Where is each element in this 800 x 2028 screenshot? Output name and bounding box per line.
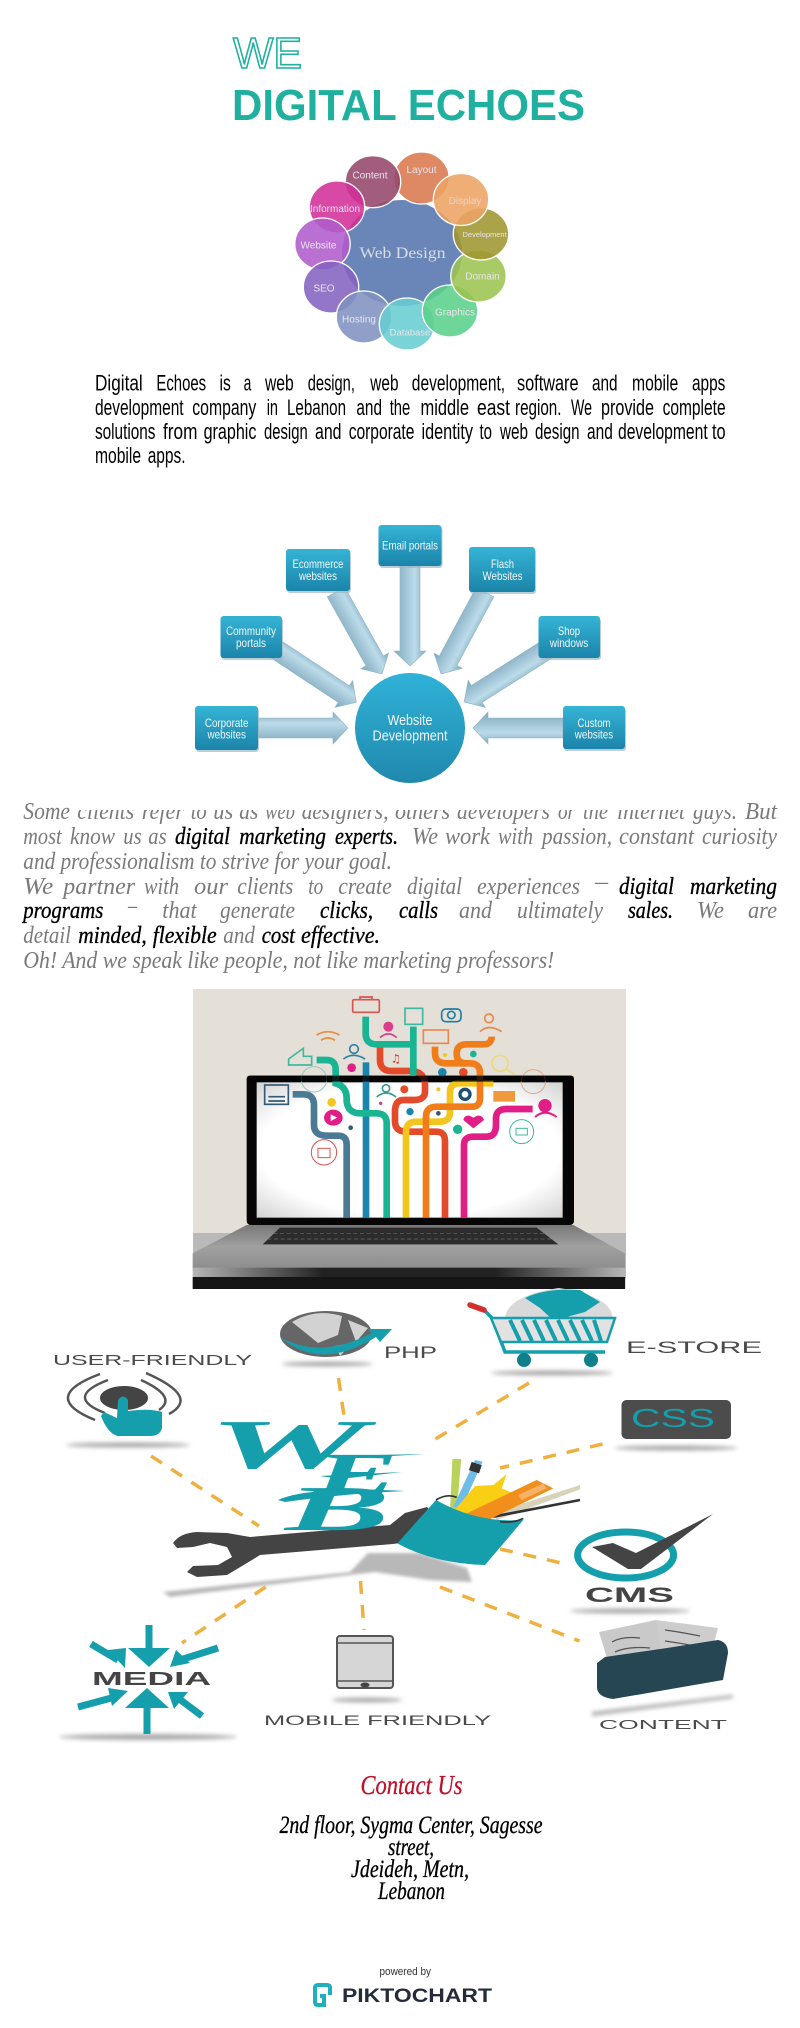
text block: about paragraph: as xyxy=(239,799,258,825)
icon: e-store shopping cart: E-STORE xyxy=(626,1338,762,1357)
text block: address: street, xyxy=(388,1834,434,1861)
text block: intro paragraph: corporate xyxy=(349,419,414,444)
text block: intro paragraph: Digital xyxy=(95,370,143,396)
text block: intro paragraph: a xyxy=(244,370,252,396)
text block: about paragraph: effective. xyxy=(301,923,380,949)
text block: about paragraph: are xyxy=(748,898,777,924)
chart: website development hub diagram xyxy=(195,525,626,783)
text block: about paragraph: our xyxy=(194,874,229,900)
text block: about paragraph: marketing xyxy=(239,824,326,850)
text block: about paragraph: – xyxy=(127,893,138,919)
box labels: Email portals xyxy=(382,538,438,552)
solid icons and dots xyxy=(383,1022,393,1032)
text block: intro paragraph: identity xyxy=(422,419,473,444)
text block: intro paragraph: company xyxy=(192,395,256,420)
text block: intro paragraph: web xyxy=(499,419,528,444)
text block: intro paragraph: solutions xyxy=(95,419,155,444)
dashed connector lines xyxy=(151,1378,603,1643)
text block: intro paragraph xyxy=(95,370,726,468)
text block: about paragraph: detail xyxy=(23,923,71,949)
icon: central wrench with WEB lettering and tool cup: B xyxy=(283,1473,390,1544)
text block: about paragraph: cost xyxy=(262,923,296,949)
text block: intro paragraph: development xyxy=(95,395,184,420)
text block: about paragraph: – xyxy=(594,869,609,895)
text block: about paragraph: and xyxy=(223,923,256,949)
text block: about paragraph: curiosity xyxy=(702,824,777,850)
icon: media converging arrows xyxy=(78,1625,218,1734)
icon: central wrench with WEB lettering and tool cup: W xyxy=(208,1407,378,1484)
text block: about paragraph: designers, xyxy=(302,799,388,825)
box labels: Ecommerce xyxy=(292,557,344,571)
text block: intro paragraph: east xyxy=(477,395,510,420)
text block: about paragraph: and professionalism to strive for your goal. xyxy=(23,849,392,875)
text block: intro paragraph: and xyxy=(592,370,618,396)
text block: intro paragraph: software xyxy=(517,370,578,396)
icon: central wrench with WEB lettering and tool cup xyxy=(163,1407,580,1597)
text block: about paragraph: We xyxy=(23,874,54,900)
text block: about paragraph: most xyxy=(23,824,63,850)
laptop base xyxy=(193,1225,625,1268)
text block: intro paragraph: to xyxy=(480,419,492,444)
text block: about paragraph: ultimately xyxy=(517,898,603,924)
illustration: laptop with colourful digital tubes xyxy=(193,989,626,1289)
chart: web design petal diagram: Domain xyxy=(465,272,500,282)
chart: web design petal diagram: Content xyxy=(352,170,388,182)
box labels: Website xyxy=(388,712,432,729)
text block: about paragraph: experts. xyxy=(335,824,398,850)
text block: about paragraph: programs xyxy=(22,898,103,924)
text block: about paragraph: Some xyxy=(23,799,70,825)
text block: address xyxy=(280,1812,542,1905)
text block: about paragraph: guys. xyxy=(693,799,737,825)
box labels: Websites xyxy=(482,569,522,583)
icon: e-store shopping cart xyxy=(470,1288,762,1367)
text block: intro paragraph: mobile xyxy=(632,370,678,396)
box labels: Shop xyxy=(558,624,580,638)
text block: about paragraph: or xyxy=(558,799,576,825)
icon: central wrench with WEB lettering and tool cup: E xyxy=(313,1441,398,1506)
text block: about paragraph: constant xyxy=(619,824,695,850)
text block: about paragraph: with xyxy=(144,874,179,900)
coloured tubes xyxy=(293,1017,533,1218)
text block: intro paragraph: to xyxy=(712,419,726,444)
laptop screen xyxy=(247,1076,574,1225)
footer: powered by piktochart xyxy=(315,1966,492,2007)
text block: address: Lebanon xyxy=(377,1878,445,1905)
title: we: WE xyxy=(233,29,302,78)
icon: php globe xyxy=(280,1311,437,1362)
text block: intro paragraph: in xyxy=(267,395,278,420)
icon: css badge xyxy=(622,1400,731,1439)
boxes xyxy=(196,527,626,752)
text block: about paragraph: clicks, xyxy=(320,898,373,924)
text block: intro paragraph: design xyxy=(535,419,580,444)
text block: about paragraph: web xyxy=(265,799,295,825)
text block: about paragraph: generate xyxy=(220,898,295,924)
illustration: web services map xyxy=(53,1288,762,1740)
text block: about paragraph xyxy=(22,790,778,974)
text block: about paragraph: us xyxy=(123,824,142,850)
icon: cms check xyxy=(578,1514,713,1607)
box labels: portals xyxy=(236,636,266,650)
text block: about paragraph: as xyxy=(148,824,167,850)
text block: intro paragraph: complete xyxy=(663,395,726,420)
box labels: websites xyxy=(207,728,246,742)
box labels: Flash xyxy=(491,557,514,571)
text block: intro paragraph: development, xyxy=(412,370,505,396)
text block: intro paragraph: region. xyxy=(515,395,562,420)
box labels xyxy=(205,538,613,744)
chart: web design petal diagram xyxy=(295,152,509,350)
text block: about paragraph: and xyxy=(459,898,493,924)
text block: about paragraph: partner xyxy=(61,874,136,900)
text block: intro paragraph: is xyxy=(220,370,231,396)
screen top bezel xyxy=(247,1076,574,1082)
title: digital echoes: DIGITAL ECHOES xyxy=(232,81,585,130)
icon: php globe: PHP xyxy=(384,1343,437,1362)
text block: intro paragraph: Echoes xyxy=(156,370,206,396)
chart: web design petal diagram: Graphics xyxy=(435,308,475,318)
icon: mobile friendly tablet xyxy=(264,1636,492,1728)
chart: web design petal diagram: Information xyxy=(310,204,360,215)
box labels: Community xyxy=(226,624,276,638)
text block: about paragraph: We xyxy=(412,824,438,850)
text block: intro paragraph: design, xyxy=(308,370,355,396)
text block: about paragraph: flexible xyxy=(153,923,217,949)
text block: intro paragraph: mobile xyxy=(95,443,141,468)
chart: web design petal diagram: Development xyxy=(462,230,508,239)
text block: about paragraph: But xyxy=(745,799,778,825)
text block: intro paragraph: the xyxy=(390,395,410,420)
ground shadows xyxy=(59,1362,737,1740)
text block: about paragraph: sales. xyxy=(628,898,673,924)
text block: address: Jdeideh, Metn, xyxy=(351,1856,469,1883)
text block: about paragraph: to xyxy=(191,799,207,825)
text block: about paragraph: developers xyxy=(457,799,550,825)
text block: about paragraph: minded, xyxy=(78,923,147,949)
text block: about paragraph: know xyxy=(70,824,115,850)
chart: web design petal diagram: Layout xyxy=(406,165,437,176)
icon: media converging arrows: MEDIA xyxy=(92,1669,211,1689)
text block: about paragraph: to xyxy=(308,874,323,900)
text block: about paragraph: We xyxy=(697,898,724,924)
text block: about paragraph: Oh! And we speak like people, not like marketing professors! xyxy=(23,948,554,974)
text block: intro paragraph: provide xyxy=(601,395,654,420)
box labels: websites xyxy=(298,569,337,583)
text block: intro paragraph: apps. xyxy=(148,443,186,468)
outlined app icons xyxy=(265,997,545,1165)
text block: about paragraph: digital xyxy=(407,874,462,900)
text block: about paragraph: clients xyxy=(77,799,134,825)
icon: mobile friendly tablet: MOBILE FRIENDLY xyxy=(264,1712,492,1728)
text block: about paragraph: digital xyxy=(619,874,674,900)
text block: about paragraph: digital xyxy=(175,824,230,850)
text block: intro paragraph: graphic xyxy=(204,419,256,444)
box labels: websites xyxy=(574,728,613,742)
text block: intro paragraph: development xyxy=(618,419,708,444)
footer: powered by piktochart: PIKTOCHART xyxy=(342,1986,492,2007)
text block: intro paragraph: middle xyxy=(420,395,469,420)
chart: web design petal diagram: Web Design xyxy=(360,245,446,262)
text block: about paragraph: marketing xyxy=(690,874,777,900)
text block: intro paragraph: apps xyxy=(692,370,725,396)
box labels: Corporate xyxy=(205,716,249,730)
text block: intro paragraph: from xyxy=(163,419,197,444)
chart: web design petal diagram: Display xyxy=(449,196,481,207)
chart: web design petal diagram: Website xyxy=(301,240,337,252)
text block: about paragraph: others xyxy=(395,799,450,825)
arrows pointing to the hub xyxy=(258,566,563,744)
chart: web design petal diagram: SEO xyxy=(313,284,335,294)
text block: intro paragraph: Lebanon xyxy=(287,395,346,420)
heading: contact us: Contact Us xyxy=(360,1770,462,1800)
text block: about paragraph: us xyxy=(213,799,233,825)
text block: about paragraph: experiences xyxy=(477,874,580,900)
text block: about paragraph: create xyxy=(338,874,392,900)
text block: address: 2nd floor, Sygma Center, Sagesse xyxy=(280,1812,542,1839)
text block: intro paragraph: and xyxy=(356,395,382,420)
text block: about paragraph: the xyxy=(583,799,608,825)
box labels: Custom xyxy=(578,716,611,730)
text block: intro paragraph: design xyxy=(264,419,308,444)
text block: about paragraph: passion, xyxy=(540,824,612,850)
text block: about paragraph: with xyxy=(498,824,533,850)
icon: user-friendly touch hand: USER-FRIENDLY xyxy=(53,1352,252,1369)
icon: css badge: CSS xyxy=(631,1403,715,1433)
icon: content folder xyxy=(597,1620,728,1732)
text block: about paragraph: work xyxy=(445,824,490,850)
text block: about paragraph: refer xyxy=(142,799,185,825)
footer: powered by piktochart: powered by xyxy=(380,1966,431,1978)
box labels: Development xyxy=(372,728,448,744)
text block: about paragraph: that xyxy=(162,898,198,924)
chart: web design petal diagram: Hosting xyxy=(342,314,376,326)
box labels: windows xyxy=(549,636,588,650)
text block: intro paragraph: and xyxy=(315,419,342,444)
icon: cms check: CMS xyxy=(585,1584,674,1607)
text block: intro paragraph: We xyxy=(571,395,592,420)
text block: intro paragraph: web xyxy=(264,370,294,396)
icon: user-friendly touch hand xyxy=(53,1352,252,1436)
text block: about paragraph: internet xyxy=(617,799,686,825)
icon: content folder: CONTENT xyxy=(599,1717,727,1732)
text block: intro paragraph: web xyxy=(370,370,398,396)
illustration: laptop with colourful digital tubes: ♫ xyxy=(391,1051,401,1065)
text block: intro paragraph: and xyxy=(587,419,613,444)
chart: web design petal diagram: Database xyxy=(390,328,430,338)
text block: about paragraph: clients xyxy=(237,874,293,900)
text block: about paragraph: calls xyxy=(399,898,438,924)
